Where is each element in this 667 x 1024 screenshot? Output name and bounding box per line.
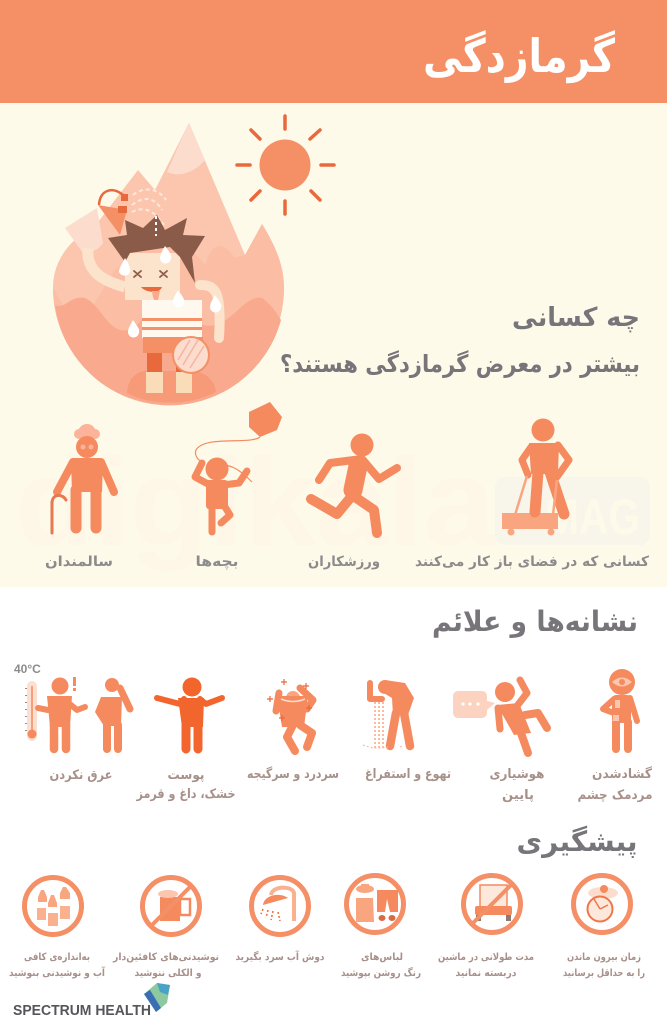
logo: Spectrum Health: SPECTRUM HEALTH [13, 1003, 151, 1019]
head [125, 253, 180, 300]
raised arm [88, 248, 125, 287]
hand fan [173, 337, 209, 373]
signs labels: تهوع و استفراغ [365, 767, 451, 782]
prevention labels: دوش آب سرد بگیرید [236, 950, 324, 963]
sweat drops [119, 216, 221, 338]
prevention labels: زمان بیرون ماندن [567, 952, 641, 963]
signs labels: مردمک چشم [578, 788, 652, 803]
prevention labels: آب و نوشیدنی بنوشید [9, 966, 106, 979]
who labels: بچه‌ها [196, 554, 238, 570]
signs labels: هوشیاری [490, 767, 544, 782]
signs labels: پوست [168, 768, 204, 783]
icon: nausea and vomiting [363, 680, 414, 748]
watermark: digikala [15, 433, 497, 572]
icon: child with kite [195, 402, 282, 532]
shirt [142, 300, 202, 338]
icon: cold shower [252, 878, 308, 934]
prevention labels [9, 950, 645, 979]
heading: prevention: پیشگیری [516, 825, 638, 858]
logo: Spectrum Health [13, 983, 170, 1019]
icon: no caffeine or alcohol [142, 878, 200, 934]
flame [53, 123, 284, 405]
who labels: سالمندان [45, 554, 113, 570]
icon: headache and dizziness [267, 679, 313, 751]
prevention labels: لباس‌های [361, 952, 403, 963]
illustration: overheated person in flame [53, 123, 284, 405]
icon: dilated pupils [603, 669, 637, 749]
face [134, 271, 167, 277]
bucket and water [65, 190, 166, 253]
icon: elderly person with cane [52, 424, 114, 533]
hair [108, 215, 205, 283]
watermark: MAG [545, 489, 640, 545]
prevention labels: و الکلی ننوشید [134, 968, 202, 979]
signs labels: خشک، داغ و قرمز [136, 787, 236, 802]
signs labels: گشادشدن [592, 766, 652, 782]
prevention labels: را به حداقل برسانید [563, 968, 645, 979]
prevention labels: به‌اندازه‌ی کافی [24, 952, 90, 963]
icon: wear light clothes [346, 876, 404, 932]
heading: who is at risk [280, 303, 640, 378]
right arm [200, 285, 220, 338]
who labels [45, 554, 650, 570]
icon: outdoor worker [502, 418, 569, 536]
prevention labels: نوشیدنی‌های کافئین‌دار [112, 952, 219, 963]
signs labels: سردرد و سرگیجه [247, 766, 339, 782]
title: گرمازدگی [423, 29, 615, 83]
prevention labels: مدت طولانی در ماشین [438, 952, 534, 963]
icon: limit time outdoors [574, 876, 630, 932]
icon: low alertness [453, 680, 547, 753]
prevention labels: رنگ روشن بپوشید [341, 967, 421, 979]
icon: sun [237, 116, 334, 214]
icon: water bottles [24, 878, 82, 934]
heading: signs and symptoms: نشانه‌ها و علائم [432, 605, 638, 638]
header banner [0, 0, 667, 103]
shorts and legs [143, 337, 203, 393]
icon: no sweating with thermometer: 40°C [14, 662, 41, 676]
prevention labels: دربسته نمانید [456, 968, 516, 979]
icon: no sweating with thermometer [14, 662, 130, 749]
icon: athlete [311, 434, 397, 533]
signs labels [50, 766, 652, 803]
icon: no closed car [464, 876, 520, 932]
who labels: کسانی که در فضای باز کار می‌کنند [415, 554, 650, 570]
who labels: ورزشکاران [308, 554, 380, 570]
signs labels: عرق نکردن [50, 768, 112, 783]
signs labels: پایین [502, 788, 534, 803]
heading: who is at risk: چه کسانی [512, 303, 640, 333]
icon: dry red skin [157, 678, 222, 749]
